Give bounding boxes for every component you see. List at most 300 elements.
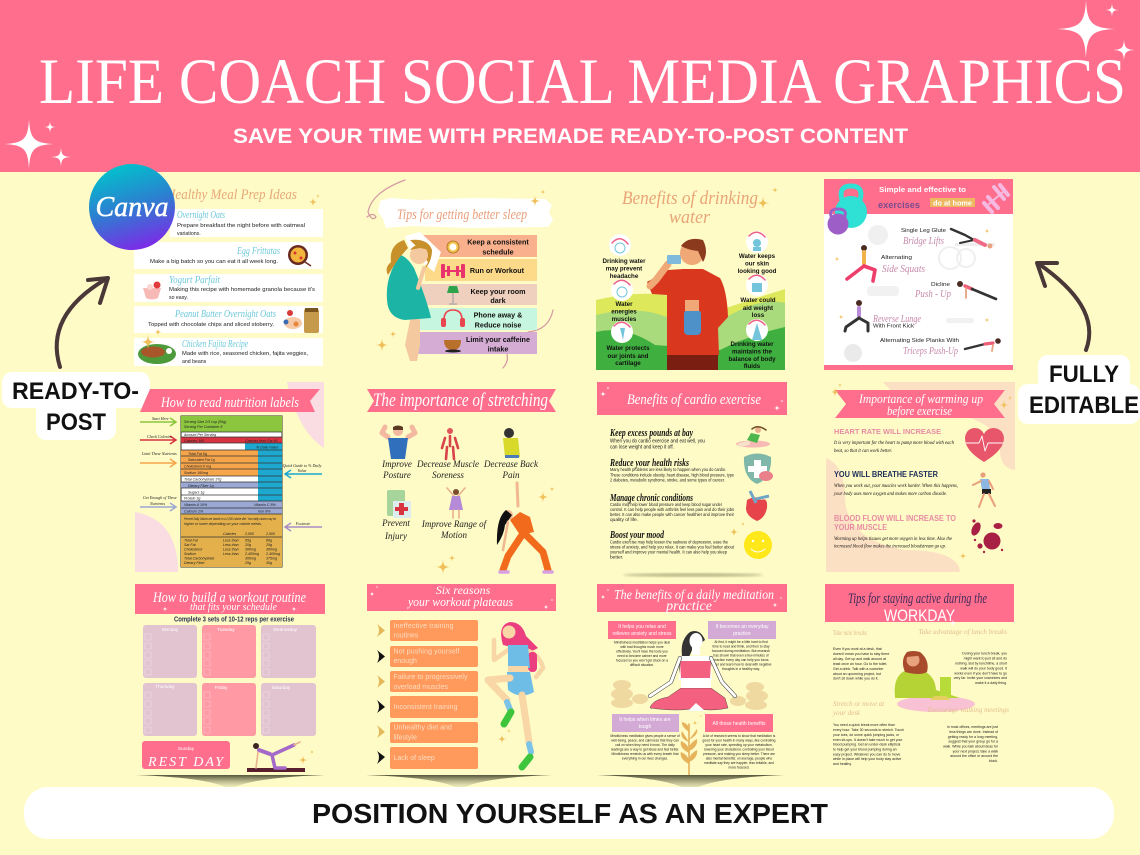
tip: stretch: every hour. Take 30 seconds to stretch. Touch xyxy=(833,728,904,732)
item: manage chronic conditions: Cardio may help lower blood pressure and keep blood sugar under xyxy=(610,502,722,508)
tip: lunch breaks: walk will do your body good. It xyxy=(960,666,1007,670)
meal row 5 xyxy=(134,338,323,366)
tip: mini breaks: doesn't mean you have to stay there xyxy=(833,652,889,656)
benefit: relax: focused so you won't get stuck on a xyxy=(616,658,668,662)
heading: water: Benefits of drinking xyxy=(622,188,758,209)
tip: mini breaks xyxy=(833,629,889,680)
arrow: check calories xyxy=(140,434,176,444)
benefit: protects joints xyxy=(606,321,650,367)
banner: workday: WORKDAY xyxy=(884,606,955,625)
item: manage chronic conditions: quality of life. xyxy=(610,517,638,523)
nutrition label table: higher or lower depending on your calorie needs. xyxy=(184,522,262,526)
tip: lunch breaks: Take advantage of lunch breaks xyxy=(918,628,1007,636)
reason 6 xyxy=(377,747,478,769)
item: blood flow: YOUR MUSCLE xyxy=(834,523,887,532)
item: blood flow: Warming up helps tissues get more oxygen in less time. Also the xyxy=(834,536,953,542)
benefit: body fluids: fluids xyxy=(744,363,761,370)
arrow: check calories: Check Calories xyxy=(147,434,172,439)
icon: gold sparkles xyxy=(756,186,778,210)
shadow xyxy=(597,775,784,792)
benefit: decrease muscle soreness xyxy=(416,428,479,480)
tip row 4: Reduce noise xyxy=(475,320,521,330)
icon: canva badge xyxy=(89,164,175,250)
nutrition label table: Serving Size 2/3 cup (55g) xyxy=(184,420,226,424)
benefit: prevent headache: headache xyxy=(610,273,639,280)
icon: shield xyxy=(744,454,773,484)
day card: sunday rest day xyxy=(142,741,230,770)
item: reduce health risks: These conditions include obesity, heart disease, high blood pressure, type xyxy=(610,472,734,478)
reason 5 xyxy=(377,722,478,743)
illustration: stones and lotus xyxy=(611,680,768,710)
nutrition label table: Total Carbohydrate 37g xyxy=(184,478,221,482)
nutrition label table: Cholesterol xyxy=(184,548,202,552)
reason 3: overload muscles xyxy=(394,684,448,691)
meal row 5: and beans xyxy=(182,359,207,365)
callout: ready-to-post: READY-TO- xyxy=(12,378,139,405)
exercise 4: With Front Kick xyxy=(873,324,914,330)
benefit: health: good for your health in many ways, like controlling xyxy=(703,738,776,742)
arrow: footnote xyxy=(285,521,322,531)
benefit: relax: need to become calmer and more xyxy=(617,654,667,658)
nutrition label table: 2,500 xyxy=(265,532,275,536)
benefit: prevent injury: Prevent xyxy=(381,518,410,528)
benefit: weight loss: Water could xyxy=(740,297,776,304)
exercise 2: Side Squats xyxy=(882,263,925,275)
illustration: yoga woman xyxy=(247,742,305,772)
tip row 2: Run or Workout xyxy=(470,266,525,275)
tip: walking meetings: your next project, take a walk xyxy=(953,750,998,754)
heading: water: water xyxy=(669,207,711,228)
item: heart rate: beat, so that it can work better. xyxy=(834,448,892,454)
tip row 1: Keep a consistent xyxy=(467,238,529,246)
benefit: everyday practice: better and learn how to deal with negative xyxy=(710,662,772,666)
benefit: skin xyxy=(738,231,777,275)
nutrition label table: 2,000 xyxy=(244,532,254,536)
illustration: woman at laptop xyxy=(895,651,975,712)
item: manage chronic conditions xyxy=(609,492,734,523)
item: boost your mood: Cardio exercise may help lessen the sadness of depression, ease the xyxy=(610,540,728,546)
illustration: meditating woman xyxy=(650,631,735,711)
banner: workday: Tips for staying active during the xyxy=(848,591,987,607)
tip: lunch breaks: works even if you don't have to go xyxy=(954,672,1007,676)
banner: meditation: The benefits of a daily meditation xyxy=(614,588,774,603)
benefit: tough times: It helps when times are xyxy=(619,717,671,723)
benefit: everyday practice: practice xyxy=(733,631,751,637)
benefit: decrease back pain: Decrease Back xyxy=(483,459,539,469)
green hills backdrop xyxy=(596,289,785,370)
benefit: decrease muscle soreness: Decrease Muscle xyxy=(416,459,479,469)
nutrition label table: Less than xyxy=(223,552,239,556)
icon: canva badge: Canva xyxy=(95,192,169,223)
nutrition label table: Total Fat xyxy=(184,538,199,542)
shadow xyxy=(366,775,552,790)
icon: gold sparkles xyxy=(375,189,546,352)
icon: yoga xyxy=(736,427,770,448)
benefit: everyday practice: At first, it might be a little hard to find xyxy=(714,640,768,644)
benefit: protects joints: Water protects xyxy=(606,345,650,352)
panel: benefits of cardio exercise xyxy=(597,382,787,577)
tip row 3: dark xyxy=(490,296,506,305)
callout: fully editable: FULLY xyxy=(1049,361,1119,388)
benefit: everyday practice: focused during meditation. But research xyxy=(712,649,770,653)
benefit: prevent injury xyxy=(381,490,411,541)
ribbon heading: warming up: before exercise xyxy=(887,403,952,418)
nutrition label table: 80g xyxy=(266,538,272,542)
meal row 2: Make a big batch so you can eat it all week long. xyxy=(150,259,278,265)
nutrition label table: Sat Fat xyxy=(184,543,197,547)
item: keep excess pounds: Keep excess pounds at bay xyxy=(609,427,693,439)
tip: stretch: easy project. Whatever you can do to move xyxy=(833,752,900,756)
benefit: improve range of motion: Improve Range of xyxy=(421,519,488,529)
benefit: relax xyxy=(608,621,676,667)
tip: mini breaks: about an upcoming project, but xyxy=(833,672,881,676)
day card: monday xyxy=(143,625,197,678)
meal row 1: variations. xyxy=(177,231,201,237)
tip row 5: Limit your caffeine xyxy=(466,335,530,344)
benefit: prevent injury: Injury xyxy=(384,531,407,541)
benefit: decrease back pain xyxy=(483,428,539,480)
benefit: everyday practice xyxy=(708,621,776,671)
meal row 4: Topped with chocolate chips and sliced stoberry. xyxy=(148,322,274,328)
day card: tuesday: Tuesday xyxy=(217,627,235,632)
tip: mini breaks: Get a drink. Talk with a coworker xyxy=(833,667,884,671)
arrow: quick guide xyxy=(283,463,322,478)
banner: plateaus xyxy=(367,583,556,611)
reason 1 xyxy=(377,620,478,641)
nutrition label table: Total Fat 5g xyxy=(188,452,207,456)
nutrition label table: 65g xyxy=(245,538,251,542)
ribbon heading: nutrition: How to read nutrition labels xyxy=(160,395,299,411)
item: boost your mood xyxy=(609,529,735,560)
benefit: improve range of motion xyxy=(421,488,488,540)
benefit: energises muscles: muscles xyxy=(612,316,637,323)
callout: position yourself: POSITION YOURSELF AS AN EXPERT xyxy=(312,798,828,829)
banner: workout: How to build a workout routine xyxy=(152,590,306,606)
icon: gold sparkles xyxy=(834,228,990,323)
benefit: health: All those health benefits xyxy=(712,721,766,727)
item: boost your mood: better. xyxy=(610,554,623,560)
benefit: everyday practice: time to read and think, and then to stay xyxy=(712,644,770,648)
benefit: weight loss: aid weight xyxy=(743,305,773,312)
nutrition label table: 300mg xyxy=(245,556,256,560)
tip row 2 xyxy=(425,259,537,281)
heading banner: sleep: Tips for getting better sleep xyxy=(397,207,527,223)
reason 1: routines xyxy=(394,632,419,640)
tip: stretch: your desk xyxy=(832,709,861,717)
exercise 4: Reverse Lunge xyxy=(872,314,921,325)
benefit: health: your heart rate, speeding up your metabolism, xyxy=(705,743,773,747)
nutrition label table: % Daily Value xyxy=(256,446,278,450)
illustration: gold leaf xyxy=(681,722,697,775)
icon: sparkles top right xyxy=(1057,0,1135,61)
benefit: body fluids: maintains the xyxy=(732,348,772,356)
arrow: right callout xyxy=(1037,263,1089,350)
benefit: protects joints: cartilage xyxy=(615,360,641,367)
tip row 1 xyxy=(423,235,537,257)
icon: gold sparkles xyxy=(692,714,702,726)
tip: lunch breaks: make it a daily thing. xyxy=(975,681,1007,685)
meal row 3: Yogurt Parfait xyxy=(169,275,220,286)
meal row 2 xyxy=(134,242,323,269)
benefit: health: meditate say they are happier, less irritable, and xyxy=(704,761,774,765)
meal row 1 xyxy=(170,209,323,237)
nutrition label table: Cholesterol 0 mg xyxy=(184,464,211,468)
benefit: energises muscles: Water xyxy=(616,301,633,308)
tip row 1: schedule xyxy=(482,248,514,256)
reason 2 xyxy=(377,646,478,667)
tip: stretch: and healthy. xyxy=(833,762,852,766)
nutrition label table: 2,400mg xyxy=(244,552,259,556)
tip: mini breaks: all day. Get up and walk around at xyxy=(833,657,886,661)
banner: meditation: practice xyxy=(665,599,712,614)
benefit: improve range of motion: Motion xyxy=(440,530,467,540)
benefit: tough times: Mindfulness meditation gives people a sense of xyxy=(610,734,680,738)
tip row 3 xyxy=(413,284,537,305)
tip: lunch breaks: nothing. But by lunchtime, a short xyxy=(955,662,1007,666)
benefit: relax: difficult situation. xyxy=(630,663,654,667)
meal row 5: Made with rice, seasoned chicken, fajita veggies, xyxy=(182,351,308,357)
nutrition label table: Sodium 160mg xyxy=(184,471,208,475)
benefit: energises muscles: energies xyxy=(611,308,637,316)
meal row 4 xyxy=(134,306,323,333)
tip: walking meetings: In most offices, meetings are just xyxy=(947,725,998,729)
day card: sunday rest day: REST DAY xyxy=(147,755,225,770)
exercise 1: Bridge Lifts xyxy=(903,235,944,247)
benefit: tough times: well-being, peace, and calmness that they can xyxy=(611,738,679,742)
benefit: improve posture: Posture xyxy=(382,470,411,480)
item: reduce health risks: 2 diabetes, metabolic syndrome, stroke, and some types of cancer. xyxy=(610,478,725,484)
tip: walking meetings: suggest that your group go for a xyxy=(948,740,998,744)
panel: tips for better sleep xyxy=(367,180,553,368)
nutrition label table: Saturated Fat 1g xyxy=(188,458,215,462)
ribbon heading: warming up xyxy=(835,390,1005,418)
nutrition label table: Calories 160 xyxy=(184,439,204,443)
nutrition label table: Less than xyxy=(223,538,239,542)
nutrition label table: Less than xyxy=(223,548,239,552)
tip row 4: Phone away & xyxy=(474,310,522,320)
nutrition label table: 25g xyxy=(265,543,272,547)
benefit: body fluids: balance of body xyxy=(728,356,776,363)
banner: cardio: Benefits of cardio exercise xyxy=(627,392,761,408)
item: blood flow xyxy=(834,514,956,550)
reason 3 xyxy=(377,671,478,692)
benefit: relax: effectively. You'll have the tools you xyxy=(616,650,668,654)
panel: staying active during workday xyxy=(825,584,1014,766)
benefit: relax: Mindfulness meditation helps you deal xyxy=(614,640,670,644)
exercise 3 xyxy=(914,281,996,300)
benefit: skin: Water keeps xyxy=(739,253,776,260)
icon: gold sparkles xyxy=(435,486,555,575)
arrow: quick guide: Value xyxy=(298,468,307,473)
tip: walking meetings: Encourage walking meetings xyxy=(927,706,1009,714)
exercise 5: Alternating Side Planks With xyxy=(880,338,959,344)
banner: cardio xyxy=(597,382,787,415)
icon: kettlebells xyxy=(828,186,867,234)
icon: gold sparkles xyxy=(140,194,320,350)
exercise 2: Alternating xyxy=(881,255,912,261)
panel: simple exercises at home xyxy=(824,179,1013,370)
panel: workout routine xyxy=(135,584,325,790)
exercise 2 xyxy=(847,245,925,281)
day card: tuesday xyxy=(202,625,256,678)
nutrition label table: 30g xyxy=(266,561,272,565)
tip: stretch: while in place will help your body stay active xyxy=(833,757,901,761)
tip: stretch xyxy=(832,700,904,766)
item: manage chronic conditions: Manage chronic conditions xyxy=(609,492,693,504)
item: keep excess pounds xyxy=(609,427,705,450)
banner: plateaus: your workout plateaus xyxy=(406,594,513,609)
meal row 4: Peanut Butter Overnight Oats xyxy=(174,309,276,320)
heading banner: sleep xyxy=(378,198,553,228)
day card: saturday xyxy=(261,683,316,736)
tip: walking meetings: around the office or around the xyxy=(950,754,998,758)
banner: meditation xyxy=(597,584,787,614)
nutrition label table: Vitamin C 8% xyxy=(254,503,277,507)
tip: lunch breaks: During your lunch break, you xyxy=(962,652,1007,656)
banner: plateaus: Six reasons xyxy=(436,583,491,597)
benefit: relax: relieves anxiety and stress xyxy=(613,631,672,637)
panel: how to read nutrition labels xyxy=(135,382,324,572)
meal row 5: Chicken Fajita Recipe xyxy=(182,339,248,350)
benefit: health: lowering your cholesterol, controlling your blood xyxy=(704,748,774,752)
heading: meal prep: Healthy Meal Prep Ideas xyxy=(165,187,297,203)
benefit: body fluids xyxy=(728,319,776,370)
illustration: woman high-knee xyxy=(488,622,543,767)
benefit: health: pressure, and making you sleep better. There are xyxy=(703,752,775,756)
reason 4 xyxy=(377,696,478,718)
item: keep excess pounds: When you do cardio exercise and eat well, you xyxy=(610,438,705,444)
nutrition label table: Calories from Fat 45 xyxy=(245,439,278,443)
icon: runner xyxy=(973,472,995,507)
benefit: skin: our skin xyxy=(745,260,769,268)
day card: monday: Monday xyxy=(162,627,179,632)
banner: workout: that fits your schedule xyxy=(190,602,277,613)
arrow: get enough: Nutrients xyxy=(149,501,165,506)
day card: friday xyxy=(202,683,256,736)
tip: mini breaks: Take mini breaks xyxy=(833,629,867,637)
illustration: man drinking water xyxy=(647,239,728,370)
icon: gold sparkles xyxy=(497,729,511,744)
arrow: quick guide: Quick Guide to % Daily xyxy=(283,463,322,468)
tip: mini breaks: don't sit down while you do it. xyxy=(833,676,878,680)
illustration: stretching woman xyxy=(497,483,552,572)
benefit: tough times: call on when they need it most. The daily xyxy=(615,743,675,747)
day card: wednesday: Wednesday xyxy=(273,627,298,632)
faded gym icons xyxy=(844,225,975,362)
day card: thursday: Thursday xyxy=(155,684,175,689)
benefit: improve posture: Improve xyxy=(381,459,412,469)
panel: six reasons workout plateaus xyxy=(366,583,556,790)
exercise 3: Push - Up xyxy=(914,288,951,300)
item: reduce health risks: Many health problems are less likely to happen when you do cardio. xyxy=(610,467,726,473)
ribbon heading: warming up: Importance of warming up xyxy=(858,391,983,406)
item: blood flow: increased blood flow makes the increased bloodstream go up. xyxy=(834,542,946,550)
exercise 1 xyxy=(901,228,995,248)
nutrition label table: Iron 8% xyxy=(258,510,271,514)
day card: friday: Friday xyxy=(215,685,228,690)
tip: walking meetings: block. xyxy=(989,759,998,763)
shadow xyxy=(136,775,325,790)
icon: smiley xyxy=(744,531,772,559)
heading: water xyxy=(622,188,758,228)
arrow: limit nutrients: Limit These Nutrients xyxy=(141,451,177,456)
benefit: everyday practice: thoughts in a healthy way. xyxy=(722,667,760,671)
benefit: prevent headache: may prevent xyxy=(606,266,642,272)
nutrition label table: Amount Per Serving xyxy=(183,433,216,437)
reason 2: enough xyxy=(394,658,417,665)
heading: exercises: Simple and effective to xyxy=(879,185,967,194)
panel: importance of warming up xyxy=(826,382,1015,572)
item: reduce health risks xyxy=(609,457,734,484)
item: breathe faster: your body uses more oxygen and makes more carbon dioxide. xyxy=(833,491,947,497)
reason 5: Unhealthy diet and xyxy=(394,724,452,732)
arrow: start here: Start Here xyxy=(152,416,169,421)
nutrition label table: Dietary Fiber xyxy=(184,561,205,565)
callout: ready-to-post: POST xyxy=(46,409,106,436)
day card: sunday rest day: Sunday xyxy=(178,746,195,752)
exercise 5 xyxy=(880,338,1001,357)
panel: benefits of drinking water xyxy=(596,186,785,370)
benefit: tough times: Mindfulness reminds us with every breath that xyxy=(611,752,679,756)
nutrition label table: 300mg xyxy=(245,548,256,552)
meal row 1: Prepare breakfast the night before with oatmeal xyxy=(177,223,305,229)
nutrition label table: 375mg xyxy=(266,556,277,560)
icon: gold sparkles xyxy=(298,750,314,765)
reason 3: Failure to progressively xyxy=(394,674,468,681)
nutrition label table: Vitamin A 10% xyxy=(184,503,208,507)
benefit: improve posture xyxy=(381,426,415,480)
soft shadow xyxy=(623,573,763,577)
icon: dumbbell xyxy=(984,185,1008,212)
reason 2: Not pushing yourself xyxy=(394,648,460,656)
benefit: everyday practice: practice every day can help you focus xyxy=(713,658,769,662)
ribbon heading: nutrition xyxy=(140,389,320,412)
tip: stretch: your toes, do some quick jumping jacks, or xyxy=(833,733,900,737)
benefit: everyday practice: It becomes an everyday xyxy=(715,624,769,630)
meal row 1: Overnight Oats xyxy=(177,210,225,221)
nutrition label table: Calcium 2% xyxy=(184,510,204,514)
arrow: start here xyxy=(140,416,176,426)
item: boost your mood: Boost your mood xyxy=(609,529,664,541)
reason 6: Lack of sleep xyxy=(394,755,435,762)
item: breathe faster xyxy=(833,470,959,497)
benefit: weight loss: loss xyxy=(752,312,765,319)
benefit: tough times: tough xyxy=(639,724,651,730)
meal row 2: Egg Frittatas xyxy=(236,246,280,257)
tip: stretch: blood pumping. Get an under-desk elliptical xyxy=(833,742,901,746)
nutrition label table: Sodium xyxy=(184,552,196,556)
item: heart rate: HEART RATE WILL INCREASE xyxy=(834,427,941,436)
nutrition label table: Less than xyxy=(223,543,239,547)
nutrition label table: 20g xyxy=(244,543,251,547)
benefit: prevent headache: Drinking water xyxy=(603,258,646,265)
decorative squiggle xyxy=(367,180,553,368)
item: reduce health risks: Reduce your health risks xyxy=(609,457,689,469)
benefit: health: A lot of research seems to show that meditation is xyxy=(703,734,776,738)
tip row 4 xyxy=(413,308,537,330)
nutrition label table: Calories xyxy=(223,532,236,536)
benefit: tough times: readings are a way to get ideas and feel better. xyxy=(611,748,679,752)
meal row 3 xyxy=(134,274,323,302)
arrow: left callout xyxy=(57,278,108,367)
icon: gold sparkles xyxy=(729,522,746,537)
tip: stretch: to help get your blood pumping during an xyxy=(833,748,897,752)
exercise 1: Single Leg Glute xyxy=(901,228,946,234)
benefit: skin: looking good xyxy=(738,268,777,275)
nutrition label table: 2,400mg xyxy=(265,552,280,556)
reason 1: Ineffective training xyxy=(394,623,454,630)
tip: walking meetings: less things are done. Instead of xyxy=(949,730,998,734)
